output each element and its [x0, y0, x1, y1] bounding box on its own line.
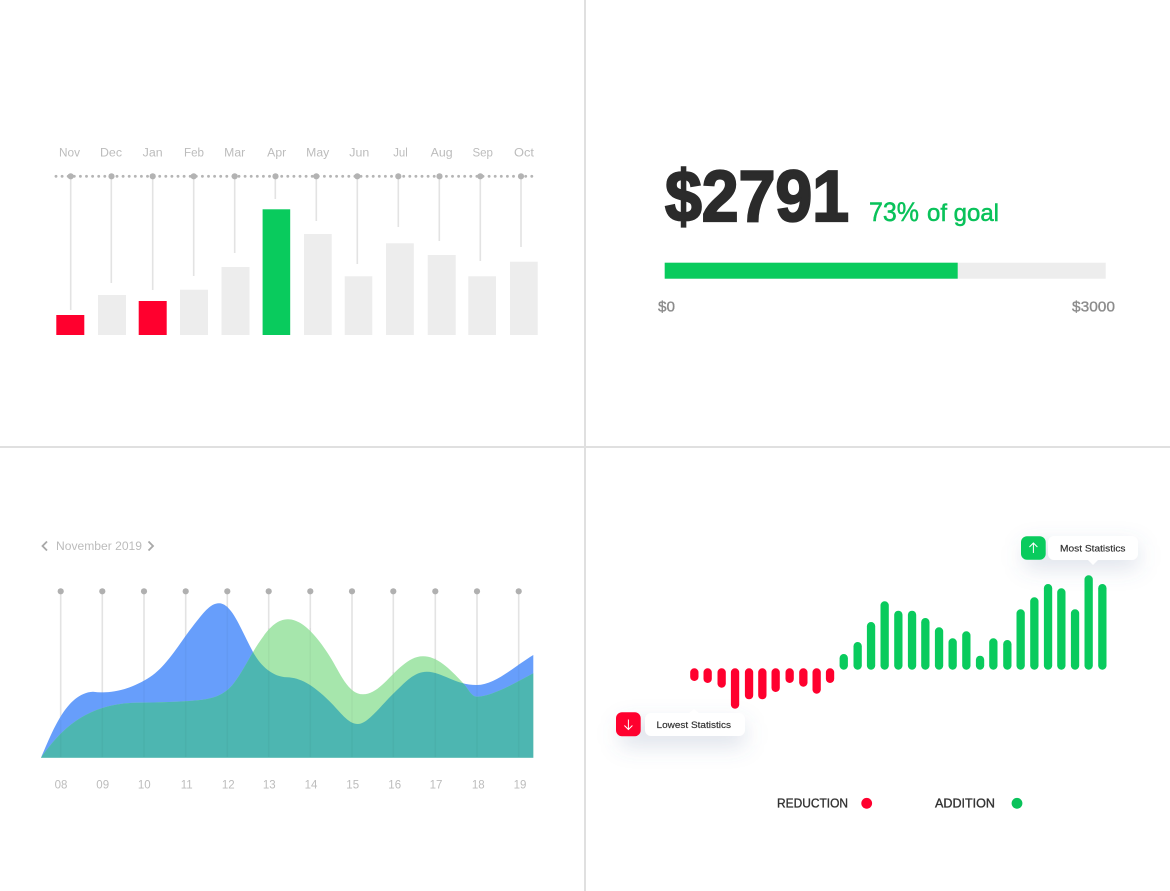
month labels: Jan [143, 148, 163, 160]
day labels: 16 [388, 780, 401, 792]
amount: $2791 [665, 157, 849, 237]
day labels: 19 [514, 780, 526, 792]
reduction bars [690, 668, 834, 709]
panel: area chart [41, 541, 533, 792]
day labels: 13 [263, 780, 276, 792]
scale labels [658, 300, 1115, 316]
day labels: 12 [222, 780, 235, 792]
day labels: 10 [138, 780, 151, 792]
month labels [59, 146, 535, 160]
progress bar [665, 263, 1106, 279]
panel: goal progress [658, 157, 1115, 316]
callout: most statistics: Most Statistics [1060, 543, 1126, 553]
addition bars [840, 575, 1106, 670]
vertical guide lines [61, 591, 519, 757]
day labels: 11 [181, 780, 193, 792]
day labels: 17 [430, 780, 442, 792]
month labels: Aug [431, 148, 453, 160]
legend: ADDITION [935, 796, 995, 810]
month labels: Nov [59, 148, 80, 160]
month labels: Oct [514, 148, 535, 160]
percent of goal: of goal [927, 200, 999, 227]
scale labels: $3000 [1072, 300, 1115, 316]
day labels [55, 780, 526, 792]
month labels: Dec [100, 148, 122, 160]
overlap area [41, 652, 534, 758]
panel: monthly bar chart [56, 146, 538, 335]
legend: REDUCTION [777, 796, 848, 810]
timeline markers [68, 173, 524, 179]
month labels: Jun [349, 148, 369, 160]
percent of goal: 73% [869, 197, 919, 227]
day labels: 18 [472, 780, 485, 792]
dotted timeline [56, 175, 535, 178]
month navigation: November 2019 [56, 541, 142, 553]
month labels: Sep [472, 146, 493, 160]
month labels: Jul [393, 148, 408, 160]
legend [777, 796, 1022, 810]
monthly bars [56, 209, 538, 335]
scale labels: $0 [658, 300, 675, 316]
panel: diverging statistics chart [616, 536, 1138, 810]
day labels: 14 [305, 780, 318, 792]
blue area [41, 603, 533, 758]
green area [41, 619, 533, 758]
callout: most statistics [1021, 536, 1138, 568]
day labels: 08 [55, 780, 67, 792]
day labels: 15 [346, 780, 359, 792]
month labels: Feb [184, 148, 204, 160]
callout: lowest statistics [616, 709, 745, 746]
day labels: 09 [96, 780, 109, 792]
guide line overlay [61, 606, 519, 757]
month labels: Mar [224, 148, 245, 160]
month labels: May [306, 148, 329, 160]
guide markers [58, 588, 522, 594]
leader lines [71, 176, 521, 310]
month labels: Apr [267, 148, 286, 160]
percent of goal [869, 197, 999, 227]
callout: lowest statistics: Lowest Statistics [656, 720, 732, 730]
